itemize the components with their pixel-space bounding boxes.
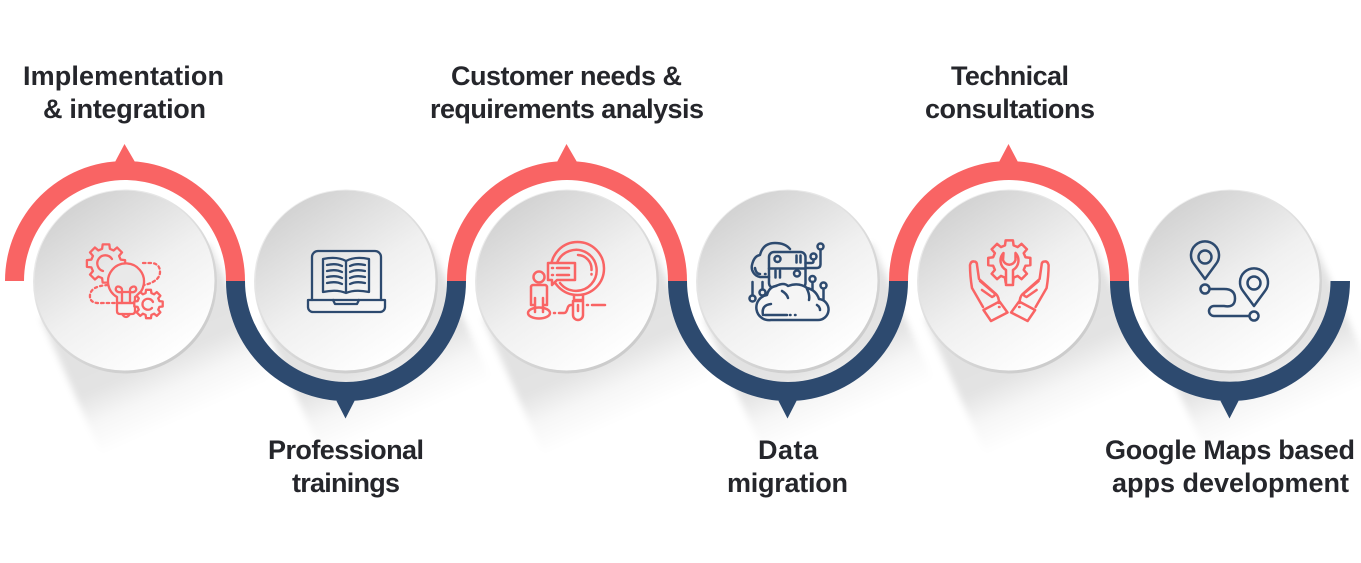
step 6: google maps based apps development <box>1110 190 1350 418</box>
label: Implementation & integration: Implementation <box>23 61 224 91</box>
step 3: customer needs and requirements analysis <box>447 144 687 374</box>
label: Customer needs & requirements analysis: Customer needs & <box>451 61 682 91</box>
label: Data migration: Data <box>758 435 819 465</box>
arc: coral top <box>447 144 687 281</box>
disc <box>917 190 1101 374</box>
arc: navy bottom <box>226 281 466 418</box>
label: Technical consultations: Technical <box>951 61 1069 91</box>
label: Professional trainings: trainings <box>292 468 400 498</box>
label: Professional trainings: Professional <box>268 435 424 465</box>
label: Data migration: migration <box>727 468 848 498</box>
disc <box>254 190 438 374</box>
disc <box>696 190 880 374</box>
icon: map pins with route <box>1191 241 1268 320</box>
arc: coral top <box>5 144 245 281</box>
label: Google Maps based apps development: Google Maps based <box>1105 435 1355 465</box>
disc <box>1138 190 1322 374</box>
label: Google Maps based apps development: apps development <box>1112 468 1349 498</box>
step 1: implementation and integration <box>5 144 245 374</box>
long shadows <box>41 244 1361 455</box>
arc: navy bottom <box>1110 281 1350 418</box>
arc: coral top <box>889 144 1129 281</box>
disc <box>475 190 659 374</box>
step 5: technical consultations <box>889 144 1129 374</box>
label: Customer needs & requirements analysis: requirements analysis <box>430 94 704 124</box>
icon: light bulb and gears <box>87 244 163 318</box>
label: Technical consultations: consultations <box>925 94 1095 124</box>
arc: navy bottom <box>668 281 908 418</box>
step 4: data migration <box>668 190 908 418</box>
disc <box>33 190 217 374</box>
label: Implementation & integration: & integration <box>43 94 206 124</box>
icon: hands with gear and wrench <box>970 240 1049 321</box>
icon: person with magnifier <box>528 242 605 320</box>
step 2: professional trainings <box>226 190 466 418</box>
icon: cloud data server <box>750 243 829 320</box>
icon: laptop with book <box>308 251 385 312</box>
